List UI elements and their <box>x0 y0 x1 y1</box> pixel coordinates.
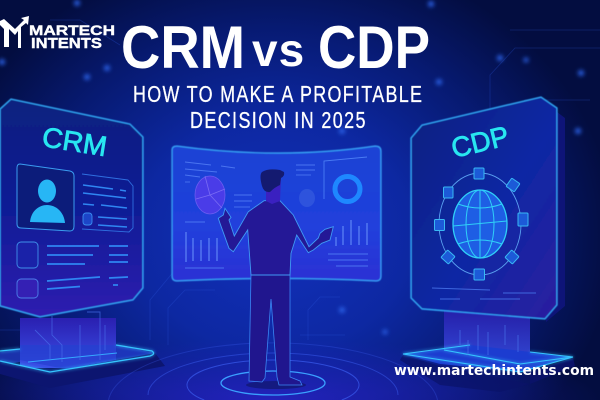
title: CRM <box>121 14 245 81</box>
list row one <box>17 242 128 268</box>
left bar chart <box>186 232 217 262</box>
icon: user avatar <box>30 180 65 223</box>
faint pie chart <box>299 189 315 207</box>
logo wordmark <box>29 22 115 52</box>
person viewing dashboard <box>218 169 333 389</box>
subtitle <box>133 82 423 134</box>
CDP panel detail lines <box>432 288 536 299</box>
logo: Martech Intents <box>0 16 115 52</box>
subtitle: DECISION IN 2025 <box>190 108 367 134</box>
list row two <box>17 277 128 298</box>
logo wordmark: INTENTS <box>31 35 102 52</box>
dashboard text lines <box>185 162 368 268</box>
logo wordmark: MARTECH <box>29 22 115 38</box>
subtitle: HOW TO MAKE A PROFITABLE <box>133 82 423 108</box>
contact details card <box>82 174 133 232</box>
donut chart <box>324 157 367 202</box>
right bar chart <box>336 220 367 246</box>
panel: CDP card <box>411 97 565 322</box>
icon: M with rising arrow <box>0 16 29 48</box>
panel: CRM stand <box>0 312 165 388</box>
title: CDP <box>318 14 430 81</box>
person head <box>266 178 281 204</box>
person torso and arms <box>218 201 333 275</box>
pie chart <box>195 176 225 214</box>
panel: center dashboard <box>172 146 381 281</box>
panel: CRM card <box>0 99 143 317</box>
title: vs <box>252 24 305 76</box>
floor rings <box>108 343 438 400</box>
website URL: www.martechintents.com <box>394 363 594 379</box>
person shadow <box>246 381 306 389</box>
profile card <box>17 164 74 231</box>
title <box>121 14 430 81</box>
CDP panel label: CDP <box>448 120 512 164</box>
panel: CDP stand <box>400 310 575 392</box>
icon: globe with data nodes <box>434 168 528 280</box>
CRM panel label: CRM <box>40 121 109 162</box>
person legs <box>249 274 302 385</box>
